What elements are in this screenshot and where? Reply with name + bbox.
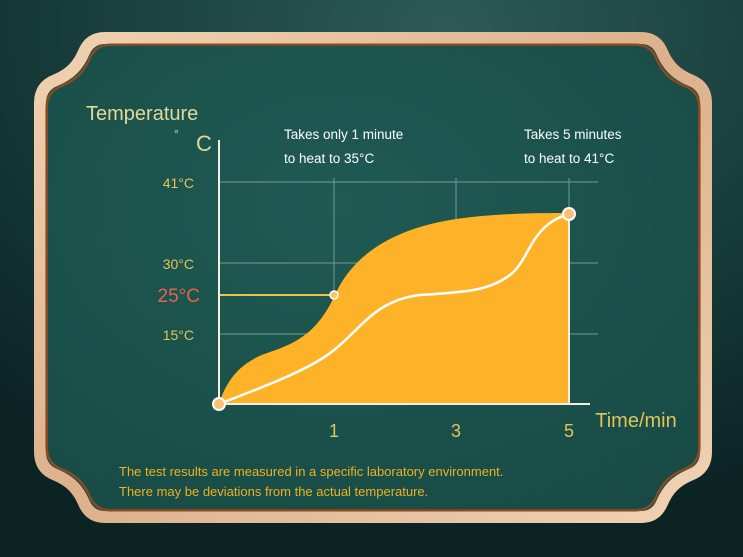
25C marker line [219,294,334,296]
area chart [219,213,569,404]
white curve line [219,214,569,404]
y labels: 25°C [158,286,200,307]
y labels [158,175,200,343]
x labels: 5 [564,421,574,441]
footnote: There may be deviations from the actual temperature. [119,484,428,499]
footnote [119,464,503,499]
axes [219,140,590,404]
x labels: 1 [329,421,339,441]
annotation 1: Takes only 1 minute [284,127,403,142]
annotation 5: to heat to 41°C [524,151,614,166]
axis title y: Temperature [86,103,198,125]
axis title y: ° [174,127,179,141]
y labels: 15°C [163,327,194,343]
footnote: The test results are measured in a specific laboratory environment. [119,464,503,479]
axis title y: C [196,131,212,156]
annotation 1: to heat to 35°C [284,151,374,166]
y labels: 41°C [163,175,194,191]
grid lines [219,178,598,404]
x labels: Time/min [595,410,677,432]
annotation 1 [284,127,403,166]
axis title y [86,103,212,156]
frame [40,38,706,517]
y labels: 30°C [163,256,194,272]
x labels [329,410,677,441]
annotation 5 [524,127,622,166]
annotation 5: Takes 5 minutes [524,127,622,142]
data points [213,208,575,410]
x labels: 3 [451,421,461,441]
